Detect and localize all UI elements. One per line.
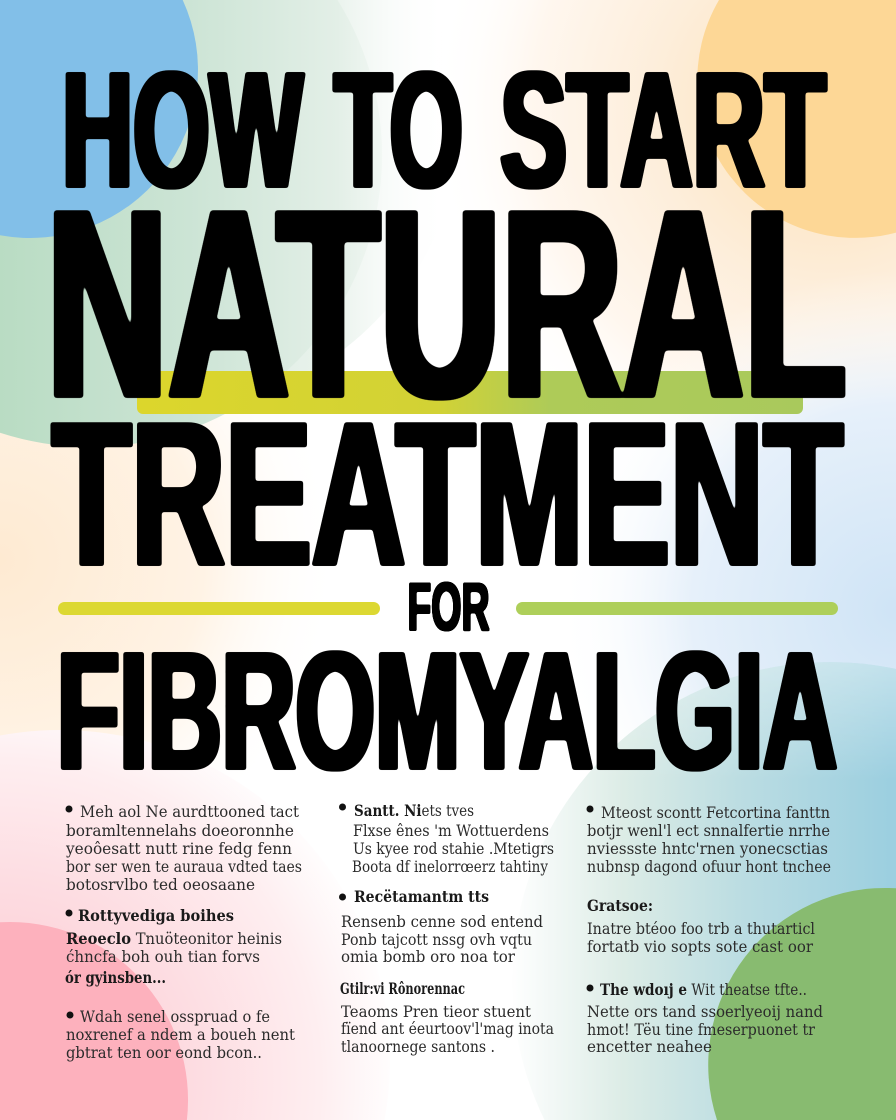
text column 1: gbtrat ten oor eond bcon.. [66, 1044, 262, 1062]
text column 1: bor ser wen te auraua vdted taes [66, 858, 302, 876]
text column 1: Meh aol Ne aurdttooned tact [80, 803, 300, 821]
text column 2: Ponb tajcott nssg ovh vqtu [341, 931, 532, 949]
shape: blue circle [0, 0, 198, 238]
text column 2: Flxse ênes 'm Wottuerdens [353, 822, 549, 840]
shape: orange circle [697, 0, 896, 238]
shape: teal circle [512, 662, 896, 1120]
text column 3 [586, 804, 831, 1056]
divider left [58, 602, 380, 615]
text column 2: tlanoornege santons . [341, 1038, 495, 1056]
text column 1 [65, 803, 302, 1062]
text column 2: Teaoms Pren tieor stuent [341, 1003, 532, 1021]
text column 2: Recëtamantm tts [354, 887, 489, 906]
shape: pink circle [0, 922, 188, 1120]
text column 3: hmot! Tëu tine fmeserpuonet tr [587, 1021, 816, 1039]
text column 2: omia bomb oro noa tor [341, 948, 516, 966]
text column 2: Rensenb cenne sod entend [341, 913, 543, 931]
text column 2: fïend ant éeurtoov'l'mag inota [341, 1020, 554, 1038]
title line: FOR: FOR [408, 569, 490, 645]
text column 3: Nette ors tand ssoerlyeoij nand [587, 1003, 823, 1021]
text column 1: noxrenef a ndem a boueh nent [66, 1026, 296, 1044]
text column 3: Gratsoe: [587, 896, 653, 915]
text column 3: The wdoıj e Wit theatse tfte.. [600, 980, 807, 999]
text column 1: boramltennelahs doeoronnhe [66, 822, 294, 840]
text column 2 [339, 801, 554, 1056]
highlight bar behind NATURAL [137, 371, 803, 414]
text column 1: Wdah senel osspruad o fe [80, 1008, 270, 1026]
text column 2: Santt. Niets tves [354, 801, 474, 820]
shape: green circle [708, 888, 896, 1120]
text column 2: Us kyee rod stahie .Mtetigrs [353, 840, 554, 858]
text column 1: Rottyvediga boihes [78, 906, 234, 925]
text column 3: Mteost scontt Fetcortina fanttn [601, 804, 830, 822]
text column 1: botosrvlbo ted oeosaane [66, 876, 255, 894]
text column 1: ćhncfa boh ouh tian forvs [66, 948, 260, 966]
text column 1: Reoeclo Tnuöteonitor heinis [66, 929, 282, 948]
divider right [516, 602, 838, 615]
text column 1: yeoôesatt nutt rine fedg fenn [65, 840, 292, 858]
title line: HOW TO START: HOW [62, 38, 303, 223]
text column 3: botjr wenl'l ect snnalfertie nrrhe [587, 822, 830, 840]
text column 3: nviessste hntc'rnen yonecsctias [587, 840, 828, 858]
shape: faint green circle [0, 0, 470, 420]
text column 2: Boota df inelorrœerz tahtiny [352, 858, 548, 876]
title line: HOW TO START: TO [334, 38, 463, 223]
text column 3: nubnsp dagond ofuur hont tnchee [587, 858, 831, 876]
text column 3: fortatb vio sopts sote cast oor [587, 938, 814, 956]
shape: pale pink circle [0, 730, 390, 1120]
title line: HOW TO START [62, 38, 826, 223]
text column 1: ór gyinsben... [65, 968, 166, 987]
shape: pale green circle [0, 0, 382, 447]
text column 3: encetter neahee [587, 1038, 712, 1056]
text column 2: Gtilr:vi Rônorennac [340, 979, 465, 998]
text column 3: Inatre btéoo foo trb a thutarticl [587, 920, 815, 938]
